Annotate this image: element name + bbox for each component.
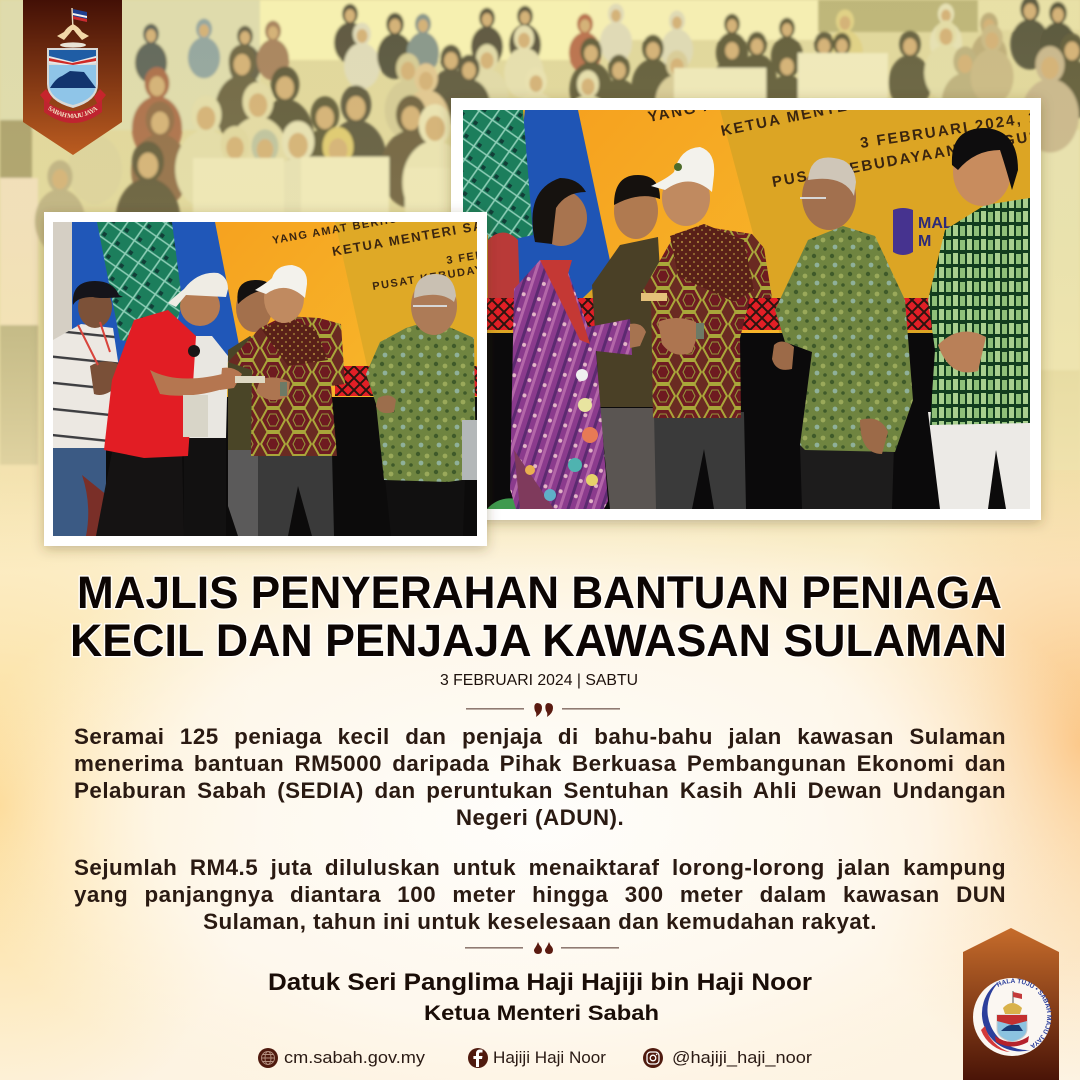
stage backdrop: 3 FEBRUARI xyxy=(446,242,527,267)
banner backdrop xyxy=(463,110,1030,509)
icon: Sabah coat of arms: SABAH MAJU JAYA xyxy=(48,106,98,118)
chief minister in batik with white cap xyxy=(641,147,772,509)
photo: chief minister handing aid to man in red (left, framed) xyxy=(44,207,527,546)
olive uniform man xyxy=(592,175,660,509)
date line: 3 FEBRUARI 2024 | SABTU xyxy=(440,672,638,689)
banner: bottom-right Hala Tuju badge pennant xyxy=(963,928,1059,1080)
text block: first paragraph: menerima bantuan RM5000 daripada Pihak Berkuasa Pembangunan Ekonomi dan xyxy=(74,751,1006,776)
text block: second paragraph: Sejumlah RM4.5 juta diluluskan untuk menaiktaraf lorong-lorong jalan kampung xyxy=(74,855,1006,880)
text block: second paragraph xyxy=(74,855,1006,934)
photo: chief minister handing aid to woman (right, framed) xyxy=(451,66,1050,520)
green batik man xyxy=(366,274,477,482)
banner backdrop: 3 FEBRUARI 2024, 10 xyxy=(859,107,1050,152)
woman in purple baju kurung xyxy=(510,178,646,509)
title: KECIL DAN PENJAJA KAWASAN SULAMAN xyxy=(70,615,1007,666)
chief minister in batik with white cap xyxy=(228,265,345,536)
banner backdrop: PUSAT KEBUDAYAAN RUNGUS xyxy=(771,127,1043,191)
text block: second paragraph: yang panjangnya diantara 100 meter hingga 300 meter dalam kawasan DUN xyxy=(74,882,1006,907)
attribution name: Datuk Seri Panglima Haji Hajiji bin Haji Noor xyxy=(268,969,812,996)
man in white trousers xyxy=(928,128,1030,509)
title: MAJLIS PENYERAHAN BANTUAN PENIAGA xyxy=(77,567,1002,618)
icon: facebook xyxy=(468,1048,488,1068)
icon: Hala Tuju Sabah Maju Jaya medallion: HALA TUJU • SABAH MAJU JAYA xyxy=(996,978,1052,1048)
facebook name: Hajiji Haji Noor xyxy=(493,1049,607,1067)
stage backdrop: KETUA MENTERI SABAH xyxy=(331,212,517,259)
icon: Sabah coat of arms xyxy=(40,8,106,123)
attribution role: Ketua Menteri Sabah xyxy=(424,1002,659,1025)
banner backdrop: KETUA MENTERI SABAH xyxy=(719,80,937,140)
stage backdrop: PUSAT KEBUDAYAAN xyxy=(372,259,511,293)
instagram handle: @hajiji_haji_noor xyxy=(672,1049,813,1067)
stage backdrop: YANG AMAT BERHORMAT xyxy=(271,207,436,247)
text block: first paragraph: Seramai 125 peniaga kecil dan penjaja di bahu-bahu jalan kawasan Sulaman xyxy=(74,724,1006,749)
man behind in white shirt xyxy=(189,336,228,438)
olive uniform man xyxy=(228,280,274,536)
website: cm.sabah.gov.my xyxy=(284,1049,426,1067)
icon: closing quote divider xyxy=(465,942,619,954)
banner backdrop: M xyxy=(918,233,931,250)
back row xyxy=(135,24,167,83)
icon: instagram xyxy=(643,1048,663,1068)
green batik man xyxy=(772,157,913,509)
banner backdrop: MAL xyxy=(918,215,953,232)
stage backdrop xyxy=(53,222,477,536)
icon: globe xyxy=(258,1048,278,1068)
front row xyxy=(132,67,182,160)
icon: Hala Tuju Sabah Maju Jaya medallion xyxy=(973,978,1052,1056)
title xyxy=(70,567,1007,666)
middle row xyxy=(432,43,464,108)
footer contact row xyxy=(258,1048,813,1068)
banner backdrop: YANG AMAT BERHORMAT xyxy=(647,66,872,126)
text block: first paragraph xyxy=(74,724,1006,830)
text block: first paragraph: Negeri (ADUN). xyxy=(456,805,624,830)
text block: first paragraph: Pelaburan Sabah (SEDIA) dan peruntukan Sentuhan Kasih Ahli Dewan Undangan xyxy=(74,778,1006,803)
text block: second paragraph: Sulaman, tahun ini untuk keselesaan dan kemudahan rakyat. xyxy=(203,909,877,934)
man in red shirt with white cap xyxy=(96,273,242,536)
icon: opening quote divider xyxy=(466,703,620,717)
man with black cap xyxy=(53,281,123,536)
banner: top-left Sabah crest pennant xyxy=(23,0,122,155)
